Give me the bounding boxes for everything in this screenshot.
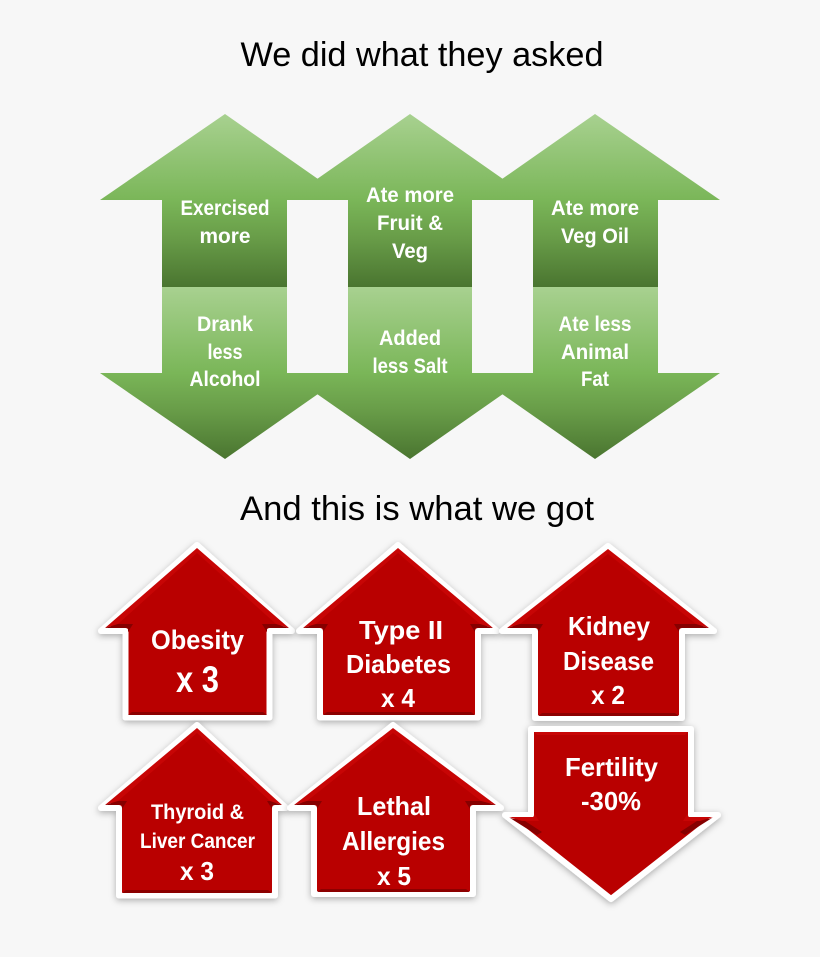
- arrow: ate more veg oil: Veg Oil: [561, 225, 629, 248]
- arrow: fertility down 30%: [505, 729, 718, 899]
- arrow: type II diabetes x 4: [299, 545, 497, 718]
- arrow: ate more fruit and veg: [287, 114, 533, 287]
- arrow: ate more veg oil: [472, 114, 720, 287]
- arrow: ate more veg oil: Ate more: [551, 197, 639, 220]
- arrow: drank less alcohol: Alcohol: [190, 368, 260, 391]
- arrow: added less salt: [287, 287, 533, 459]
- arrow: added less salt: Added: [379, 327, 441, 350]
- arrow: exercised more: more: [200, 225, 250, 248]
- arrow: thyroid and liver cancer x 3: Thyroid &: [151, 801, 244, 824]
- panel: red arrows: [101, 545, 718, 899]
- arrow: kidney disease x 2: x 2: [591, 680, 625, 710]
- arrow: kidney disease x 2: Kidney: [568, 611, 651, 641]
- arrow: thyroid and liver cancer x 3: Liver Cancer: [140, 830, 255, 853]
- arrow: obesity x 3: [101, 545, 292, 718]
- arrow: drank less alcohol: Drank: [197, 313, 253, 336]
- arrow: added less salt: less Salt: [372, 355, 448, 378]
- arrow: ate less animal fat: Animal: [561, 341, 629, 364]
- arrow: drank less alcohol: less: [208, 341, 242, 364]
- arrow: thyroid and liver cancer x 3: x 3: [180, 856, 214, 886]
- arrow: kidney disease x 2: Disease: [563, 646, 654, 676]
- arrow: type II diabetes x 4: Type II: [359, 615, 443, 645]
- arrow: ate more fruit and veg: Ate more: [366, 184, 454, 207]
- arrow: ate less animal fat: Fat: [581, 368, 609, 391]
- title: and this is what we got: And this is what we got: [240, 490, 595, 528]
- arrow: thyroid and liver cancer x 3: [101, 725, 286, 896]
- arrow: fertility down 30%: Fertility: [565, 752, 659, 782]
- arrow: lethal allergies x 5: Allergies: [342, 826, 445, 856]
- arrow: ate more fruit and veg: Veg: [392, 240, 428, 263]
- arrow: lethal allergies x 5: Lethal: [357, 791, 431, 821]
- arrow: kidney disease x 2: [502, 546, 714, 718]
- arrow: lethal allergies x 5: x 5: [377, 861, 411, 891]
- arrow: type II diabetes x 4: Diabetes: [346, 649, 451, 679]
- arrow: obesity x 3: Obesity: [151, 625, 244, 655]
- panel: green arrows: [100, 114, 720, 459]
- arrow: ate more fruit and veg: Fruit &: [377, 212, 443, 235]
- arrow: fertility down 30%: -30%: [581, 786, 641, 816]
- arrow: type II diabetes x 4: x 4: [381, 683, 415, 713]
- arrow: ate less animal fat: Ate less: [558, 313, 632, 336]
- arrow: lethal allergies x 5: [290, 725, 501, 894]
- arrow: drank less alcohol: [100, 287, 348, 459]
- arrow: exercised more: Exercised: [180, 197, 270, 220]
- title: we did what they asked: We did what they asked: [240, 36, 604, 74]
- arrow: exercised more: [100, 114, 348, 287]
- arrow: obesity x 3: x 3: [176, 659, 219, 700]
- arrow: ate less animal fat: [472, 287, 720, 459]
